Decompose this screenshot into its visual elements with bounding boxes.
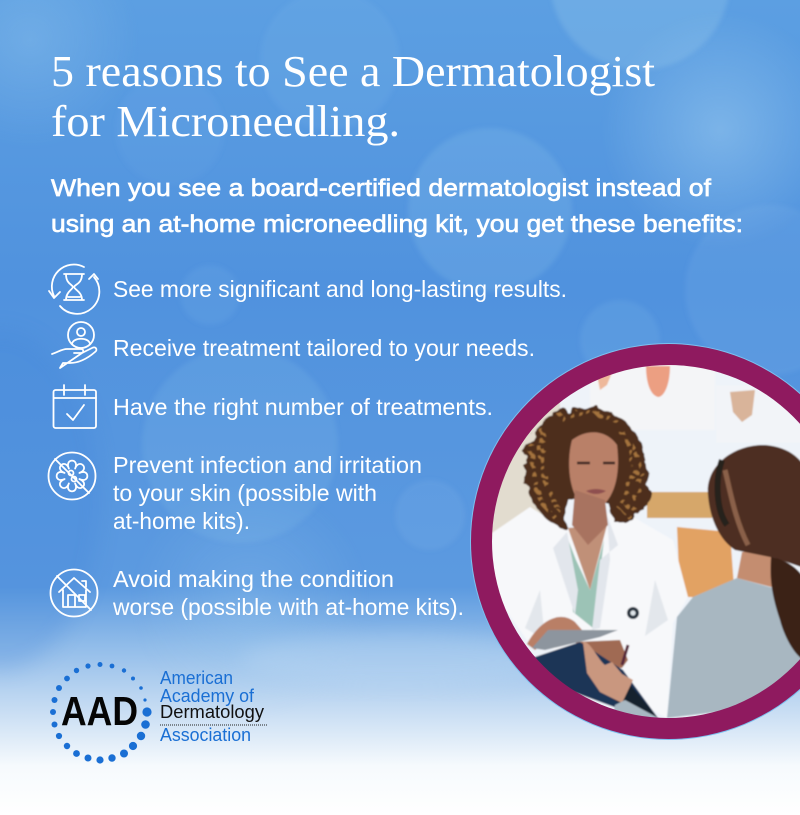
title — [51, 47, 655, 146]
icon: hourglass with circular arrows — [49, 265, 99, 314]
icon: germ crossed out — [48, 452, 96, 500]
logo wordmark — [160, 667, 267, 745]
photo: doctor consulting with a patient — [492, 365, 800, 718]
title: for Microneedling. — [51, 97, 400, 146]
icon: calendar with check — [54, 385, 96, 428]
subheading: using an at-home microneedling kit, you get these benefits: — [51, 211, 743, 238]
icon: house crossed out — [50, 570, 98, 616]
title: 5 reasons to See a Dermatologist — [51, 47, 655, 96]
logo wordmark: American — [160, 667, 233, 688]
logo: American Academy of Dermatology Association — [50, 662, 267, 764]
benefits list — [112, 276, 567, 620]
icon: hand holding person — [52, 322, 96, 368]
benefits list: to your skin (possible with — [113, 480, 377, 506]
photo frame: maroon ring — [470, 343, 800, 740]
doctor — [492, 507, 688, 722]
subheading — [51, 175, 743, 238]
logo wordmark: Dermatology — [160, 701, 265, 722]
benefits list: Prevent infection and irritation — [113, 452, 422, 478]
doctor hair — [524, 407, 649, 528]
benefits list: at-home kits). — [113, 508, 250, 534]
doctor face — [569, 432, 618, 509]
benefits list: See more significant and long-lasting results. — [113, 276, 567, 302]
benefits list: Avoid making the condition — [113, 566, 394, 592]
logo dot ring — [50, 662, 152, 764]
logo wordmark: Academy of — [160, 685, 255, 706]
subheading: When you see a board-certified dermatologist instead of — [51, 175, 711, 202]
benefits list: Receive treatment tailored to your needs. — [113, 335, 535, 361]
logo AAD letters: AAD — [61, 688, 138, 734]
benefits list: worse (possible with at-home kits). — [112, 594, 464, 620]
benefits list: Have the right number of treatments. — [113, 394, 493, 420]
logo wordmark: Association — [160, 724, 251, 745]
patient — [667, 445, 800, 718]
